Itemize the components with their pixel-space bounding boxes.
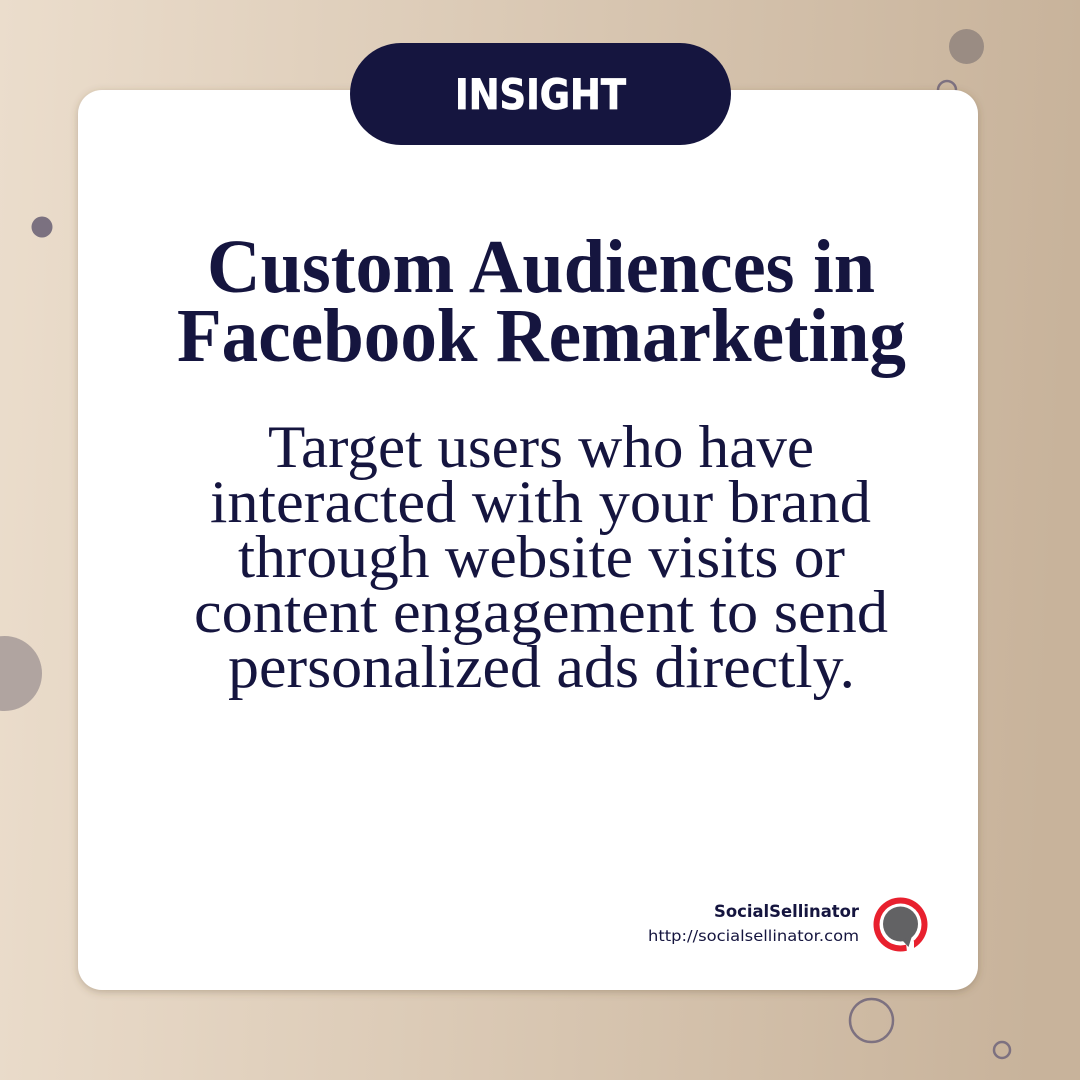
body text: Target users who have [268, 414, 814, 480]
body text: interacted with your brand [210, 469, 871, 535]
body text: content engagement to send [194, 579, 888, 645]
title: Facebook Remarketing [177, 294, 906, 378]
panel: white card [78, 90, 978, 990]
brand url: http://socialsellinator.com [648, 927, 859, 945]
icon: brand logo [874, 898, 928, 952]
body text: personalized ads directly. [228, 634, 855, 700]
body text: through website visits or [238, 524, 845, 590]
body text [194, 414, 888, 700]
brand name: SocialSellinator [714, 902, 860, 922]
badge: insight: INSIGHT [455, 70, 626, 119]
badge: insight [350, 43, 731, 145]
title [177, 225, 906, 378]
title: Custom Audiences in [207, 225, 875, 309]
